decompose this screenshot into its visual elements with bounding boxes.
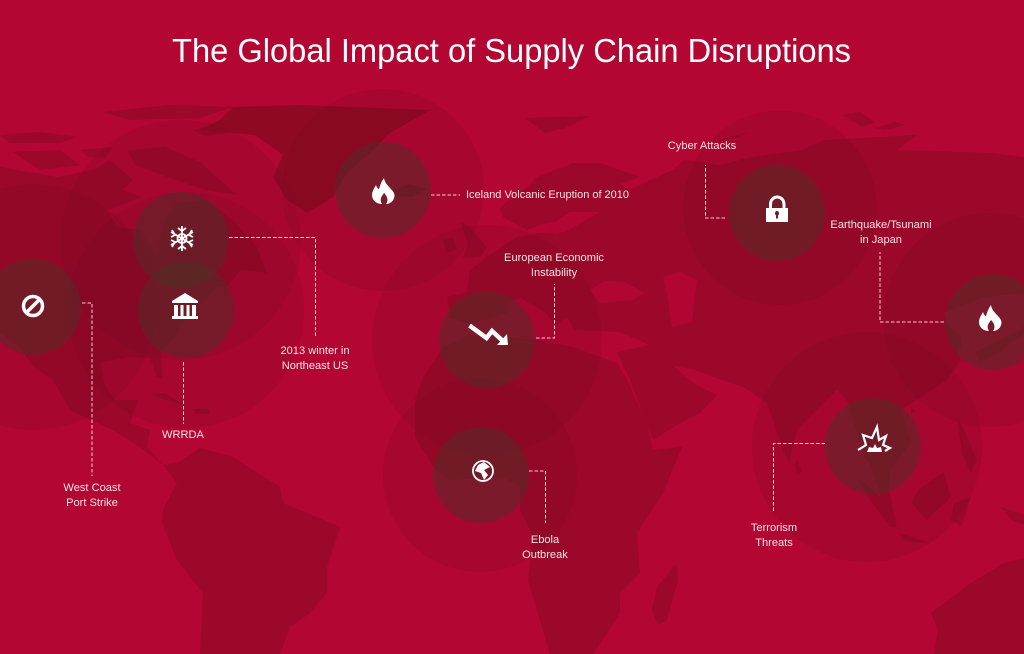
title: The Global Impact of Supply Chain Disruptions <box>172 32 851 69</box>
halos <box>0 89 1024 572</box>
marker: Cyber Attacks <box>668 140 825 261</box>
icon: prohibited <box>24 296 42 316</box>
land: Sri Lanka <box>795 460 802 473</box>
marker: Ebola Outbreak <box>433 427 568 561</box>
land: Southeast Asia islands <box>857 408 1024 543</box>
marker: Terrorism Threats <box>751 398 921 549</box>
marker: Earthquake/Tsunami in Japan: Earthquake/Tsunami <box>830 219 932 231</box>
land: Greenland <box>200 105 430 213</box>
marker: European Economic Instability: Instability <box>531 267 578 279</box>
land: South America <box>162 448 340 654</box>
marker: European Economic Instability <box>439 252 604 388</box>
icon: snowflake <box>171 226 193 251</box>
land: Arabia <box>617 345 717 440</box>
land: Japan and Korea <box>948 325 1024 362</box>
land: Caribbean <box>150 393 210 414</box>
icon: globe <box>473 461 493 481</box>
icon: flame <box>372 178 395 204</box>
inland seas <box>547 213 697 327</box>
land: Arctic Russia islands <box>717 112 905 140</box>
marker: Earthquake/Tsunami in Japan <box>830 219 1024 370</box>
marker: West Coast Port Strike: Port Strike <box>66 497 118 509</box>
land: Iceland <box>393 184 427 197</box>
land: UK and Ireland <box>443 222 487 258</box>
marker: Cyber Attacks: Cyber Attacks <box>668 140 737 152</box>
icon: padlock <box>770 197 784 208</box>
land: Madagascar <box>652 563 678 625</box>
marker: 2013 winter in Northeast US <box>133 192 350 372</box>
icon: flame <box>979 305 1002 331</box>
land: Arctic Canada <box>0 105 240 195</box>
land: Australia <box>931 558 1024 654</box>
marker: Ebola Outbreak: Outbreak <box>522 549 568 561</box>
marker: Earthquake/Tsunami in Japan: in Japan <box>860 234 902 246</box>
marker: 2013 winter in Northeast US: 2013 winter in <box>280 345 350 357</box>
marker: Iceland Volcanic Eruption <box>335 142 629 238</box>
icon: falling arrow <box>470 326 504 342</box>
marker: WRRDA: WRRDA <box>162 429 205 441</box>
marker: Terrorism Threats: Terrorism <box>751 522 797 534</box>
land: North America <box>0 160 267 465</box>
marker: 2013 winter in Northeast US: Northeast US <box>282 360 348 372</box>
marker: WRRDA <box>138 262 234 441</box>
icon: explosion <box>858 427 890 451</box>
marker: West Coast Port Strike <box>0 259 121 509</box>
icon: bank <box>172 293 198 319</box>
land: Eurasia <box>447 135 1024 527</box>
marker: Ebola Outbreak: Ebola <box>531 534 560 546</box>
marker: Iceland Volcanic Eruption: Iceland Volcanic Eruption of 2010 <box>466 189 629 201</box>
marker: Terrorism Threats: Threats <box>755 537 793 549</box>
land: Svalbard <box>525 116 590 133</box>
marker: West Coast Port Strike: West Coast <box>63 482 121 494</box>
marker: European Economic Instability: European Economic <box>504 252 604 264</box>
land: Africa <box>415 335 682 654</box>
